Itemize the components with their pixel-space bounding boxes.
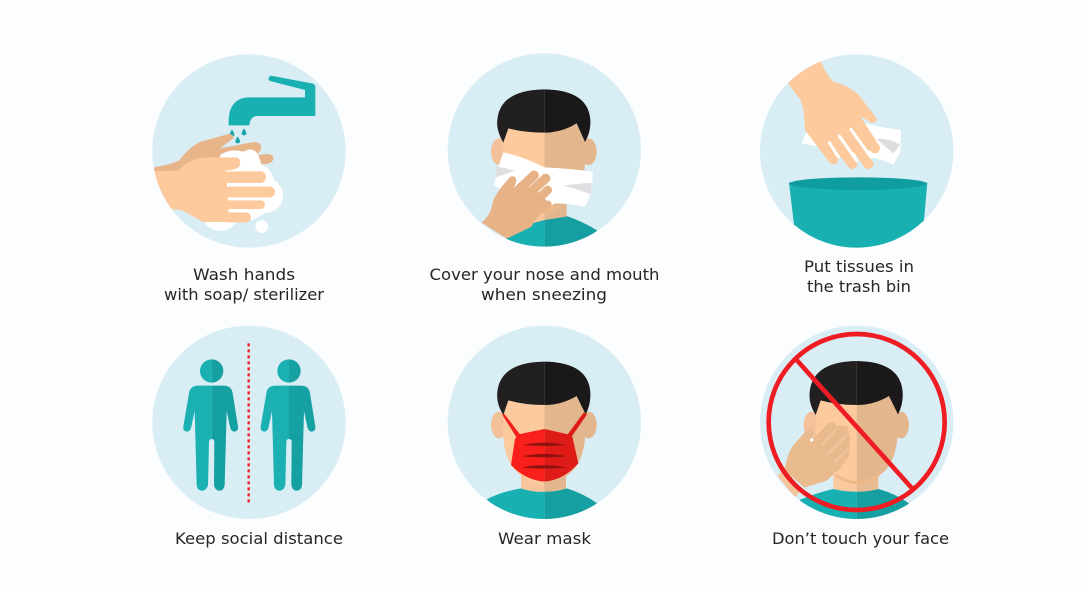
background circle [448,53,641,247]
icon: tissue [494,152,593,206]
icon: neck [521,475,566,492]
caption: cover nose and mouth: when sneezing [481,285,607,304]
background circle [760,326,953,519]
caption: wear mask: Wear mask [498,529,592,548]
icon: face [503,396,586,486]
icon: hand [482,175,550,239]
icon: back hand [154,134,273,173]
icon: shirt [799,489,909,522]
dotted divider line [245,343,252,503]
icon: prohibition sign [769,334,945,510]
icon: shirt [503,216,597,248]
icon: hand [787,60,877,164]
icon: face [816,396,898,486]
caption: wash hands: with soap/ sterilizer [164,285,324,304]
icon: water drops [230,128,246,143]
background circle [152,54,346,248]
icon: neck and face [503,124,585,227]
icon: hair [497,89,590,143]
icon: right person [261,359,315,491]
caption: wash hands: Wash hands [193,265,295,284]
icon: soap foam [205,149,283,233]
icon: ears [491,412,597,438]
panel: put tissues in the bin [760,54,953,248]
icon: front hand [150,157,275,222]
icon: hand [777,422,850,497]
icon: ears [491,138,597,165]
caption: put tissues in the bin: the trash bin [807,277,911,296]
caption: put tissues in the bin: Put tissues in [804,257,914,276]
caption: wash hands [164,265,324,304]
icon: neck [833,475,878,492]
caption: cover nose and mouth: Cover your nose and mouth [430,265,660,284]
icon: water tap [229,76,315,125]
icon: shirt [487,488,597,522]
caption: cover nose and mouth [430,265,660,304]
icon: left person [183,359,238,491]
panel: wear mask [448,326,641,522]
panel: keep social distance [152,326,346,519]
panel: cover nose and mouth [448,53,641,248]
caption: put tissues in the bin [804,257,914,296]
icon: hair [497,362,590,415]
icon: trash bin [789,177,927,248]
icon: face mask [502,413,587,482]
icon: ears [804,412,909,438]
panel: wash hands [150,54,346,248]
caption: keep social distance: Keep social distance [175,529,343,548]
background circle [448,326,641,519]
background circle [760,54,953,248]
icon: hair [809,361,903,415]
icon: tissue [802,123,901,165]
panel: don't touch your face [760,326,953,522]
background circle [152,326,346,519]
caption: don't touch your face: Don’t touch your face [772,529,949,548]
